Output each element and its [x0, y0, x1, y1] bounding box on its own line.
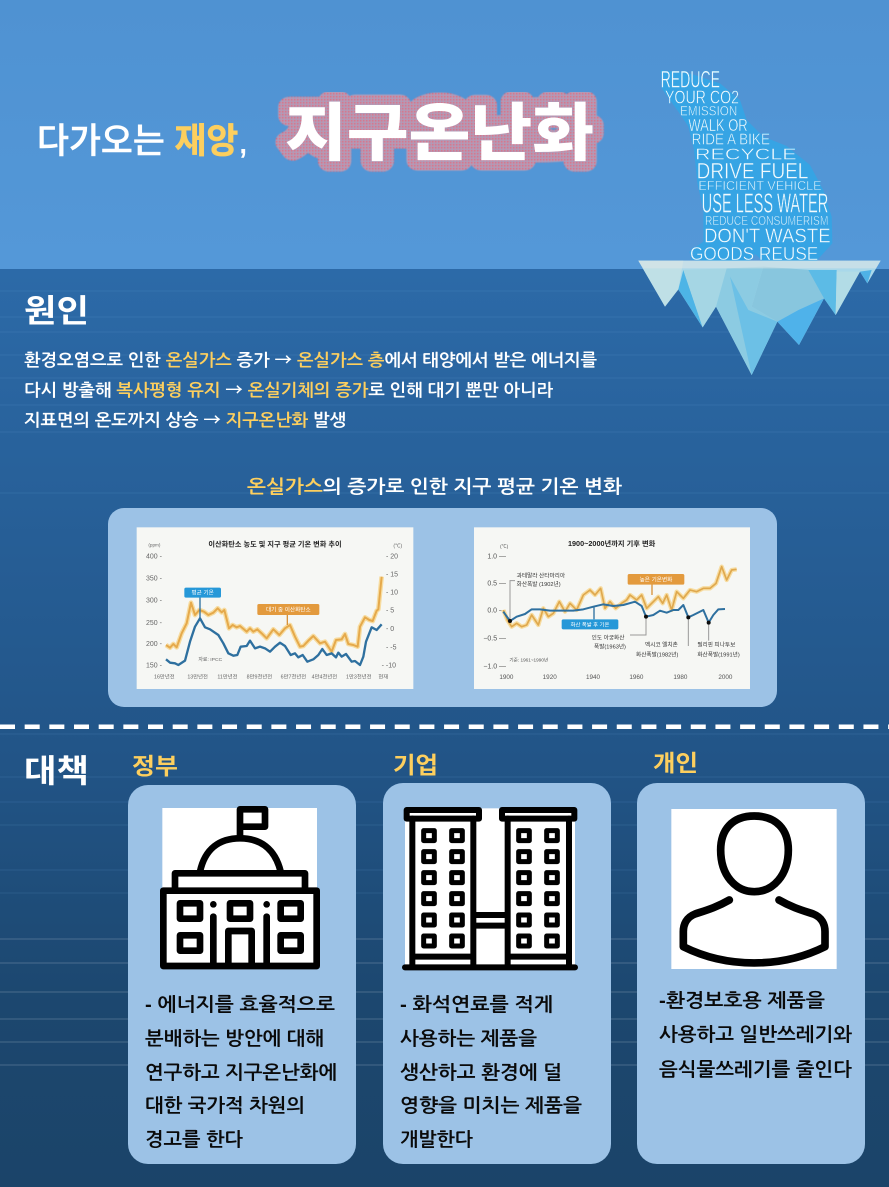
chart: climate change 1900 to 2000: 필리핀 피나투보 — [697, 641, 735, 649]
chart: CO2 and temperature trend: (℃) — [393, 542, 402, 549]
chart: CO2 and temperature trend: - 0 — [386, 626, 394, 633]
chart: CO2 and temperature trend: - 5 — [386, 608, 394, 615]
polar bear made of words: RIDE A BIKE — [692, 131, 770, 148]
panel: individuals — [637, 783, 865, 1164]
chart: CO2 and temperature trend: 현재 — [378, 672, 388, 680]
chart: CO2 and temperature trend: - -10 — [382, 663, 396, 670]
chart: climate change 1900 to 2000: −0.5 — — [483, 636, 506, 643]
chart: climate change 1900 to 2000 — [474, 527, 750, 689]
chart: climate change 1900 to 2000: (℃) — [500, 544, 509, 550]
chart: climate change 1900 to 2000: 0.5 — — [487, 581, 506, 588]
chart: climate change 1900 to 2000: 폭발(1963년) — [594, 642, 626, 650]
companies text: 사용하는 제품을 — [400, 1028, 537, 1050]
chart: CO2 and temperature trend: 1만3천년전 — [346, 672, 372, 680]
chart: climate change 1900 to 2000: 화산폭발(1982년) — [636, 651, 678, 659]
chart: CO2 and temperature trend: - -5 — [386, 644, 397, 651]
government text: 분배하는 방안에 대해 — [145, 1028, 324, 1050]
polar bear made of words: DRIVE FUEL — [697, 158, 808, 183]
government text: - 에너지를 효율적으로 — [145, 994, 335, 1016]
chart: CO2 and temperature trend: - 20 — [386, 553, 398, 560]
causes text block: 다시 방출해 복사평형 유지 → 온실기체의 증가로 인해 대기 뿐만 아니라 — [24, 376, 553, 401]
chart: CO2 and temperature trend: - 10 — [386, 590, 398, 597]
polar bear made of words: EFFICIENT VEHICLE — [698, 178, 822, 193]
causes text block: 지표면의 온도까지 상승 → 지구온난화 발생 — [24, 406, 346, 431]
background: sea — [0, 269, 889, 1187]
chart: climate change 1900 to 2000: 1.0 — — [487, 553, 506, 560]
causes text block — [24, 346, 597, 431]
title: main text: 지구온난화 — [285, 99, 594, 169]
chart: CO2 and temperature trend: 250 - — [146, 620, 163, 627]
polar bear made of words: YOUR CO2 — [665, 86, 739, 107]
chart: CO2 and temperature trend: 11만년전 — [217, 672, 238, 680]
government text: 연구하고 지구온난화에 — [145, 1063, 337, 1084]
heading: causes: 원인 — [24, 293, 89, 329]
icon: government building — [162, 808, 317, 966]
chart: CO2 and temperature trend: 이산화탄소 농도 및 지구 평균 기온 변화 추이 — [208, 540, 342, 549]
title: main text: 지구온난화 — [285, 99, 594, 169]
polar bear made of words: REDUCE — [661, 66, 720, 93]
polar bear made of words: GOODS REUSE — [690, 243, 818, 264]
individuals text: 사용하고 일반쓰레기와 — [659, 1024, 852, 1046]
companies text: 영향을 미치는 제품을 — [400, 1095, 582, 1117]
chart: CO2 and temperature trend: 6만7천년전 — [281, 672, 306, 680]
chart: climate change 1900 to 2000: 멕시코 엘치촌 — [645, 641, 678, 649]
chart: climate change 1900 to 2000: 높은 기온변화 — [640, 575, 673, 583]
chart: climate change 1900 to 2000: 0.0 — — [487, 608, 506, 615]
title — [37, 99, 594, 169]
polar bear made of words: EMISSION — [680, 104, 737, 119]
causes text block: 환경오염으로 인한 온실가스 증가 → 온실가스 층에서 태양에서 받은 에너지를 — [24, 346, 597, 371]
polar bear made of words: WALK OR — [688, 115, 748, 135]
polar bear made of words: REDUCE CONSUMERISM — [705, 214, 828, 228]
panel: government — [128, 785, 356, 1164]
chart: CO2 and temperature trend: 16만년전 — [154, 672, 175, 680]
chart: CO2 and temperature trend: 평균 기온 — [191, 589, 214, 597]
chart: climate change 1900 to 2000: 화산폭발 (1902년) — [517, 580, 561, 588]
companies text: - 화석연료를 적게 — [400, 994, 553, 1016]
chart: CO2 and temperature trend: 4만4천년전 — [312, 672, 337, 680]
government text: 대한 국가적 차원의 — [145, 1096, 305, 1117]
chart: climate change 1900 to 2000: 화산폭발(1991년) — [697, 651, 740, 659]
chart: CO2 and temperature trend: 350 - — [146, 575, 163, 582]
chart: CO2 and temperature trend: 대기 중 이산화탄소 — [266, 605, 311, 613]
title: lead text: 다가오는 재앙, — [37, 122, 248, 161]
chart: climate change 1900 to 2000: 1900~2000년까지 기후 변화 — [568, 539, 656, 548]
chart: CO2 and temperature trend: 자료: IPCC — [198, 656, 223, 663]
companies text: 생산하고 환경에 덜 — [400, 1062, 562, 1084]
government text: 경고를 한다 — [145, 1129, 243, 1151]
chart: climate change 1900 to 2000: 1980 — [673, 674, 688, 681]
chart: CO2 and temperature trend: - 15 — [386, 572, 398, 579]
icon: office buildings — [405, 808, 575, 968]
heading: government: 정부 — [132, 753, 178, 779]
government text — [145, 994, 337, 1151]
panel: charts — [108, 508, 777, 707]
chart: climate change 1900 to 2000: 기준: 1961~1990년 — [509, 657, 548, 664]
individuals text: -환경보호용 제품을 — [659, 990, 825, 1012]
chart: climate change 1900 to 2000: 인도 아궁화산 — [592, 633, 624, 641]
polar bear made of words — [661, 66, 832, 264]
panel: companies — [383, 783, 611, 1164]
chart: CO2 and temperature trend: 300 - — [146, 598, 163, 605]
chart: CO2 and temperature trend: 8만9천년전 — [247, 672, 272, 680]
chart section heading: 온실가스 의 증가로 인한 지구 평균 기온 변화 — [247, 476, 623, 497]
chart: CO2 and temperature trend: (ppm) — [148, 543, 161, 548]
chart: CO2 and temperature trend: 400 - — [146, 553, 163, 560]
polar bear made of words: DON'T WASTE — [704, 226, 831, 248]
illustration: polar bear on iceberg — [638, 66, 881, 375]
chart: CO2 and temperature trend: 13만년전 — [187, 672, 208, 680]
chart: CO2 and temperature trend — [137, 527, 413, 689]
companies text: 개발한다 — [400, 1130, 473, 1151]
iceberg — [638, 261, 881, 375]
heading: companies: 기업 — [393, 752, 438, 778]
polar bear made of words: RECYCLE — [695, 146, 797, 163]
background: sky — [0, 0, 889, 269]
companies text — [400, 994, 582, 1151]
heading: countermeasures: 대책 — [24, 753, 89, 789]
icon: person — [671, 809, 837, 969]
chart: climate change 1900 to 2000: 2000 — [718, 674, 733, 681]
chart: CO2 and temperature trend: 200 - — [146, 641, 163, 648]
chart: climate change 1900 to 2000: 1960 — [629, 674, 644, 681]
heading: individuals: 개인 — [653, 750, 698, 776]
chart: climate change 1900 to 2000: 1920 — [543, 674, 557, 681]
chart: climate change 1900 to 2000: 과테말라 산타마리아 — [517, 571, 566, 579]
individuals text — [659, 990, 852, 1081]
individuals text: 음식물쓰레기를 줄인다 — [659, 1059, 852, 1081]
chart: climate change 1900 to 2000: 1940 — [586, 674, 601, 681]
chart: CO2 and temperature trend: 150 - — [146, 663, 163, 670]
chart: climate change 1900 to 2000: 화산 폭발 후 기온 — [571, 620, 609, 628]
chart: climate change 1900 to 2000: −1.0 — — [483, 663, 506, 670]
divider — [0, 724, 889, 729]
chart: climate change 1900 to 2000: 1900 — [499, 674, 514, 681]
